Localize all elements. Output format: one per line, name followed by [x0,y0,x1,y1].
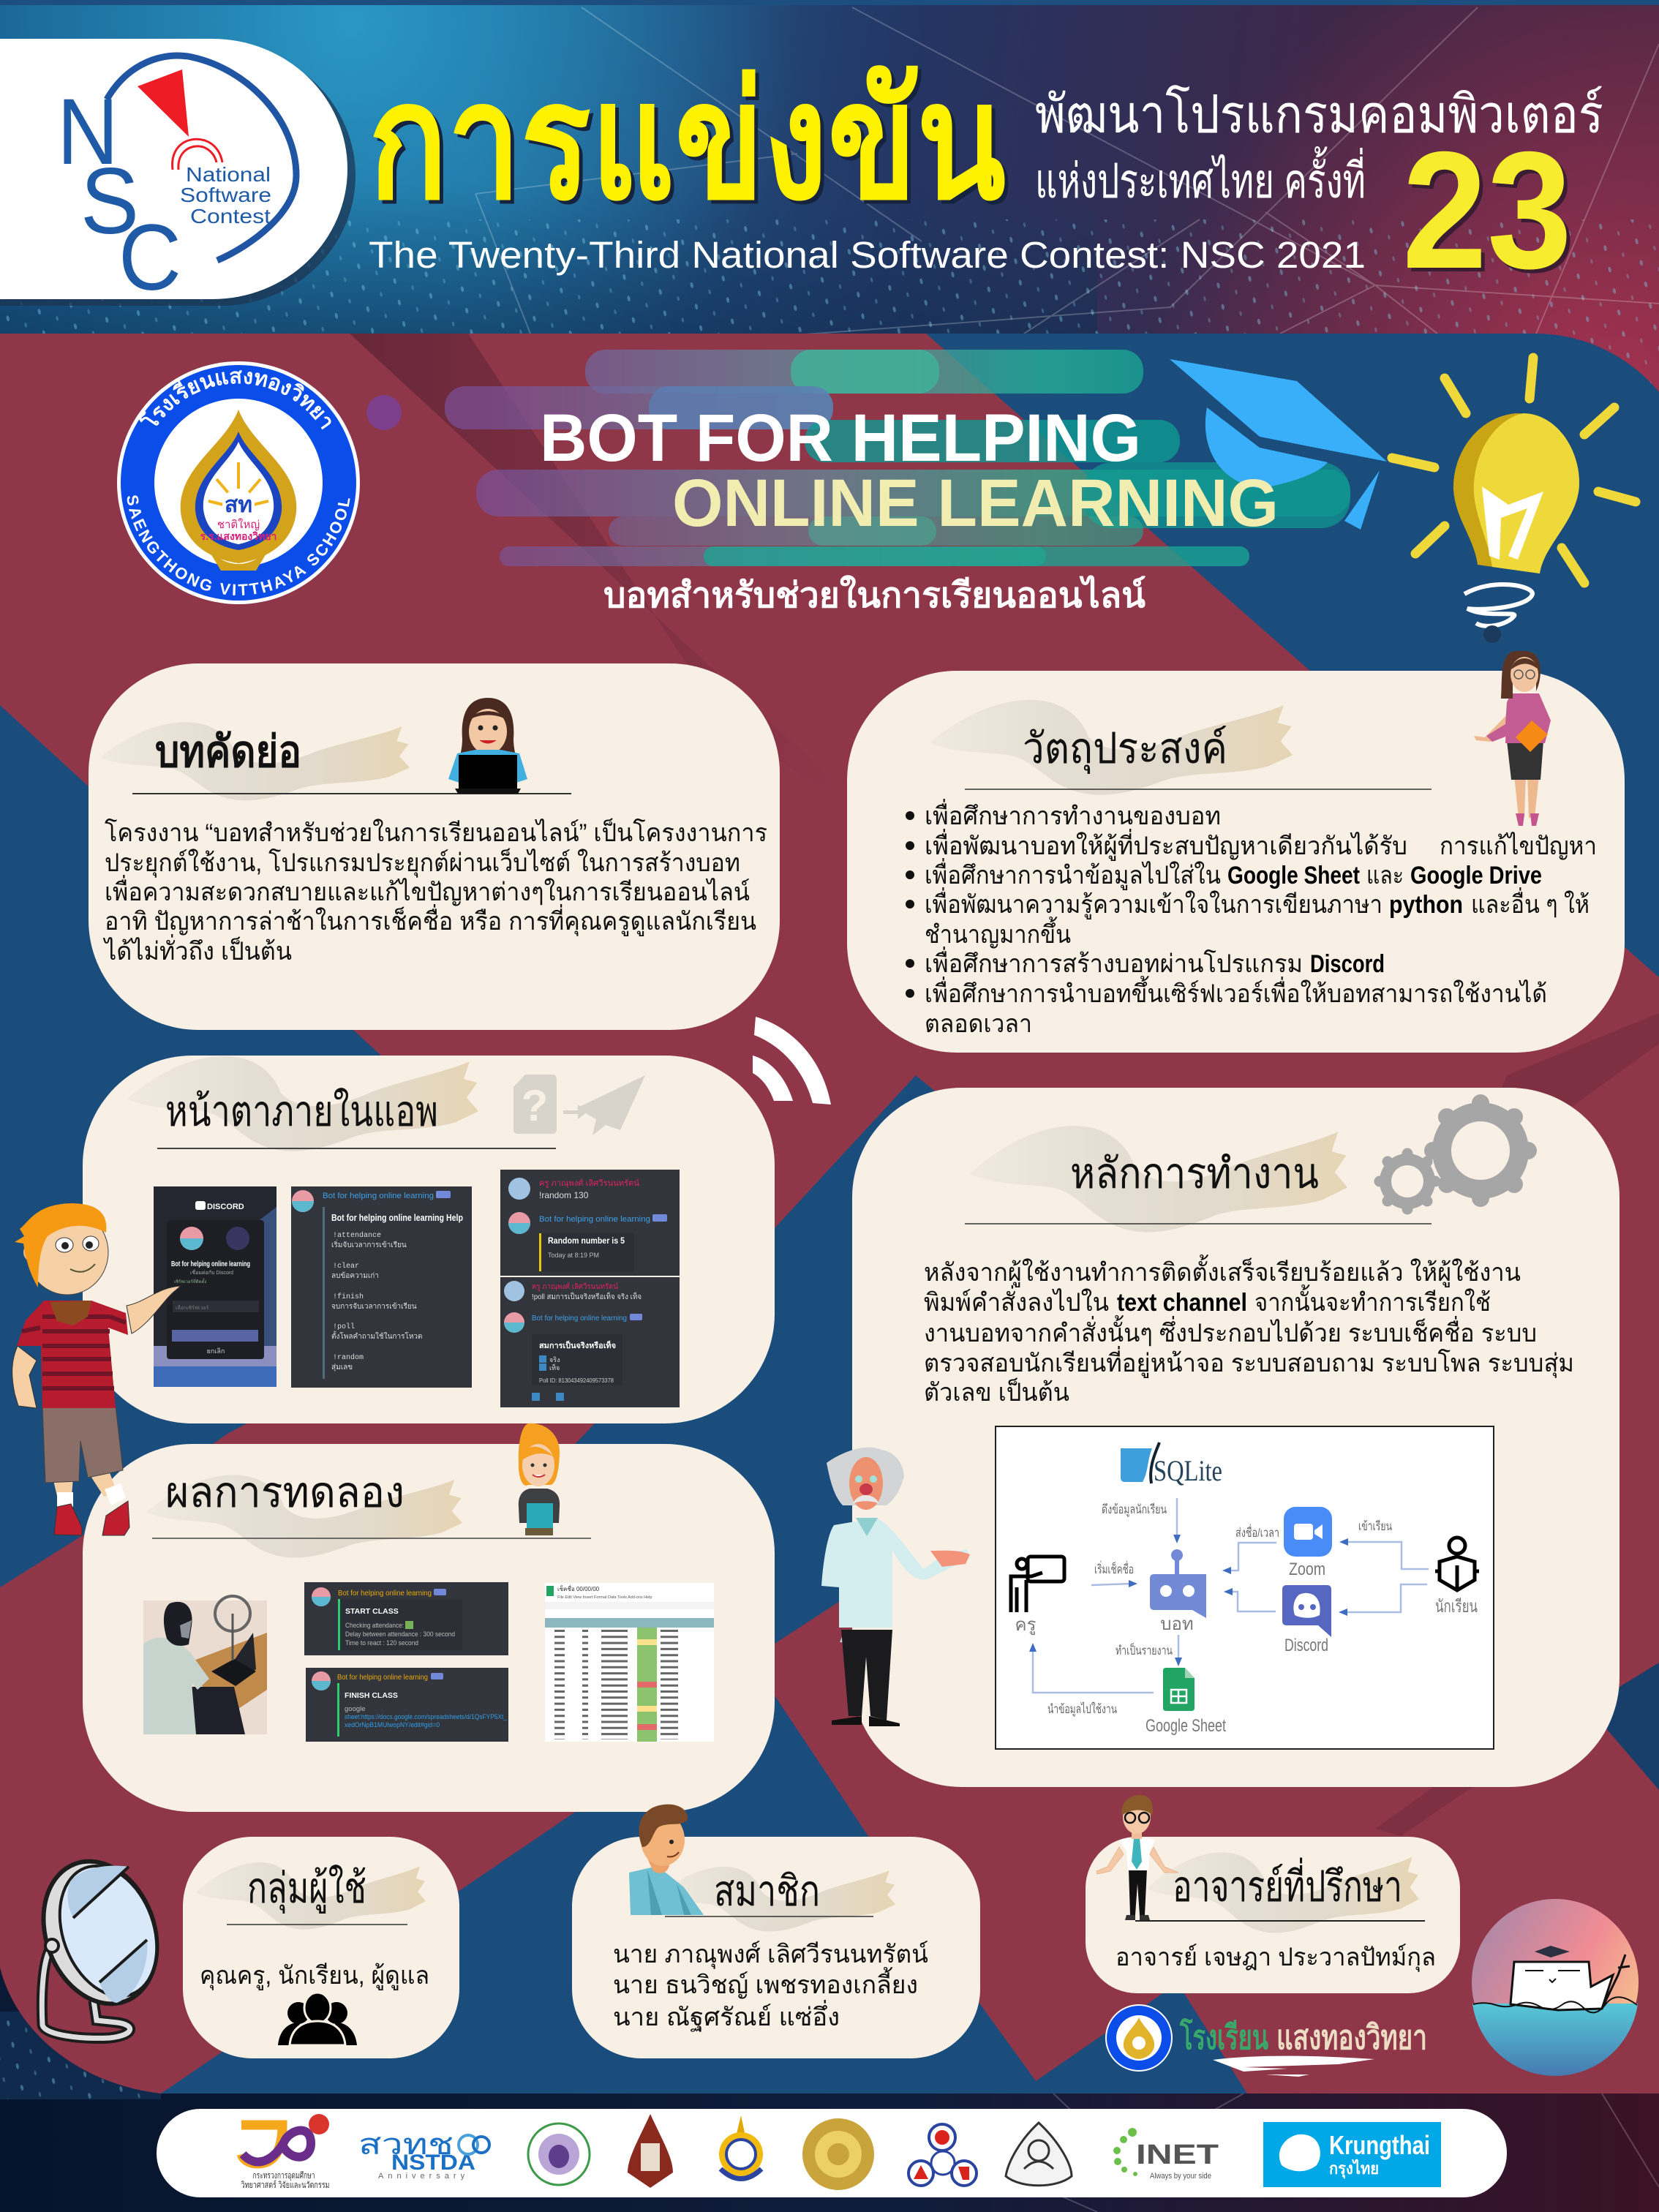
screenshot: bot help: !poll [333,1323,355,1331]
labels: diagram text [1015,1502,1478,1736]
text: school name [1179,2017,1427,2077]
screenshot: discord login [154,1186,276,1387]
labels: diagram text: ส่งชื่อ/เวลา [1235,1524,1279,1540]
labels: diagram text: บอท [1160,1614,1194,1634]
logo: NSTDA [358,2129,489,2181]
icon: discord [1282,1585,1331,1637]
list: objectives [906,799,1597,1038]
screenshot: finish class [306,1668,508,1742]
icon: school logo: ร.ร.แสงทองวิทยา [200,530,276,542]
logo: ministry of higher education [241,2114,329,2190]
screenshot: bot help: !clear [333,1262,359,1271]
screenshot: finish class: xedOrNpB1MUlwopNY/edit#gid=0 [345,1721,440,1728]
icon: google sheet [1163,1668,1195,1711]
screenshot: random command: Bot for helping online learning [539,1215,650,1224]
icon: school logo: โรงเรียนแสงทองวิทยา [139,370,331,430]
heading: working principles: หลักการทำงาน [1070,1150,1319,1197]
screenshot: bot help [291,1186,472,1388]
icon: document and paper plane: ? [522,1081,548,1130]
main background panel [0,334,1659,2094]
screenshot: poll command: ครู ภาณุพงศ์ เลิศวีรนนทรัตน์ [532,1282,618,1291]
text: working principles body: พิมพ์คำสั่งลงไปใน [924,1285,1109,1317]
logo panel: NSC: C [118,206,181,310]
icon: zoom [1284,1507,1332,1557]
subtitle: Thai contest name [1035,84,1603,208]
icon: SQLite: SQLite [1154,1454,1222,1487]
heading: objectives: วัตถุประสงค์ [1023,725,1227,775]
text: member names: นาย ภาณุพงศ์ เลิศวีรนนทรัตน์ [613,1941,928,1969]
screenshot: poll command [500,1277,680,1407]
screenshot: finish class: google [345,1705,366,1713]
screenshot: bot help: ลบข้อความเก่า [331,1271,379,1280]
heading: ONLINE LEARNING: ONLINE LEARNING [672,466,1279,541]
screenshot: finish class: FINISH CLASS [345,1691,398,1700]
logo panel: NSC: Software [180,184,271,206]
screenshot: poll command: Bot for helping online learning [532,1314,627,1323]
icon: girl holding book [519,1423,560,1535]
screenshot: random command: Random number is 5 [548,1237,625,1246]
heading: user group: กลุ่มผู้ใช้ [247,1864,366,1914]
labels: diagram text: นำข้อมูลไปใช้งาน [1047,1701,1117,1717]
list: objectives: Discord [1310,950,1385,978]
subtitle: Thai contest name: แห่งประเทศไทย ครั้งที่ [1035,146,1366,208]
panel: experiment results [83,1444,775,1812]
screenshot: bot help: สุ่มเลข [331,1363,353,1372]
icon: wifi arcs [753,1017,831,1105]
text: member names: นาย ณัฐศรัณย์ แซ่อึ่ง [613,2000,840,2032]
list: objectives: ชำนาญมากขึ้น [925,917,1071,949]
screenshot: discord login: ยกเลิก [207,1347,225,1355]
logo: NSTDA: NSTDA [391,2151,475,2175]
screenshot: start class: Time to react : 120 second [345,1639,418,1647]
logo: Silpakorn University [1006,2123,1072,2186]
screenshot: poll command: สมการเป็นจริงหรือเท็จ [539,1340,616,1350]
list: objectives: Google Sheet [1227,862,1360,889]
text: working principles body: หลังจากผู้ใช้งานทำการติดตั้งเสร็จเรียบร้อยแล้ว ให้ผู้ใช้งาน [924,1254,1521,1287]
logo: gold seal [802,2118,874,2190]
labels: diagram text: นักเรียน [1435,1597,1478,1617]
logo: Khon Kaen University [628,2114,673,2188]
panel: objectives [847,671,1625,1053]
screenshot: bot help: เริ่มจับเวลาการเข้าเรียน [331,1239,407,1249]
arrows: flow connectors [1029,1498,1429,1693]
screenshot: discord login: เลือกเซิร์ฟเวอร์ [176,1305,209,1311]
labels: diagram text: Google Sheet [1146,1716,1226,1736]
logo: Krungthai: กรุงไทย [1329,2159,1379,2179]
list: objectives: และอื่น ๆ ให้ [1471,887,1590,919]
panel: abstract [89,663,780,1030]
heading: advisor: อาจารย์ที่ปรึกษา [1173,1857,1402,1911]
heading: members: สมาชิก [714,1867,820,1915]
screenshot: bot help: Bot for helping online learning Help [331,1213,463,1223]
icon: reading student [1435,1538,1479,1590]
logo panel: NSC: N [57,80,118,184]
screenshot: bot help: !random [333,1353,364,1362]
icon: male student [629,1805,704,1915]
text: working principles body: งานบอทจากคำสั่งนั้นๆ ซึ่งประกอบไปด้วย ระบบเช็คชื่อ ระบบ [924,1315,1537,1347]
screenshot: discord login: เซิร์ฟเวอร์ที่ติดตั้ง [174,1277,206,1284]
screenshot: discord login: Bot for helping online learning [171,1260,250,1268]
text: working principles body: จากนั้นจะทำการเรียกใช้ [1254,1284,1491,1317]
banner stripes [366,350,1350,566]
icon: school logo: ชาติใหญ่ [217,518,260,531]
list: objectives: Google Drive [1410,862,1542,889]
panel: app screens [83,1056,775,1423]
screenshot: finish class: Bot for helping online learning [337,1673,428,1682]
text: abstract body: อาทิ ปัญหาการล่าช้าในการเช็คชื่อ หรือ การที่คุณครูดูแลนักเรียน [105,904,756,936]
text: working principles body: ตรวจสอบนักเรียนที่อยู่หน้าจอ ระบบสอบถาม ระบบโพล ระบบสุ่ม [924,1346,1574,1378]
text: school name: แสงทองวิทยา [1276,2018,1427,2056]
heading: Thai project title: บอทสำหรับช่วยในการเรียนออนไลน์ [603,574,1146,615]
labels: diagram text: ทำเป็นรายงาน [1116,1642,1173,1658]
screenshot: finish class: sheet:https://docs.google.com/spreadsheets/d/1QsFYP5Xt_ [345,1713,508,1720]
icon: old scientist [821,1447,970,1726]
text: abstract body: โครงงาน “บอทสำหรับช่วยในการเรียนออนไลน์” เป็นโครงงานการ [105,818,767,847]
icon: woman with laptop [448,698,527,794]
logo: technology institute gears [908,2124,977,2186]
header background [0,0,1659,454]
screenshot: attendance spreadsheet [545,1583,714,1742]
text: advisor name: อาจารย์ เจษฎา ประวาลปัทม์กุล [1116,1944,1436,1972]
icon: mascot circle [1472,1899,1639,2076]
text: user group list: คุณครู, นักเรียน, ผู้ดูแล [200,1962,429,1990]
icon: teacher at board [1011,1557,1064,1612]
logo: INET: INET [1136,2140,1219,2170]
logo: Krungthai [1263,2122,1441,2187]
screenshot: bot help: !attendance [333,1231,381,1240]
icon: document and paper plane [514,1075,645,1135]
list: objectives: เพื่อพัฒนาบอทให้ผู้ที่ประสบปัญหาเดียวกันได้รับ [925,829,1407,861]
screenshot: poll command: Poll ID: 813043492409573378 [539,1377,614,1384]
labels: diagram text: Zoom [1289,1560,1325,1579]
icon: standing teacher [1474,651,1551,826]
text: member names [613,1941,928,2032]
panel: user group [183,1837,459,2058]
icon: gears [1380,1102,1529,1209]
list: objectives: เพื่อศึกษาการนำบอทขึ้นเซิร์ฟเวอร์เพื่อให้บอทสามารถใช้งานได้ [925,976,1547,1008]
list: objectives: และ [1366,862,1404,889]
screenshot: discord login: DISCORD [207,1203,244,1211]
chart: system flow diagram [996,1426,1494,1749]
screenshot: poll command: !poll สมการเป็นจริงหรือเท็จ จริง เท็จ [532,1291,642,1301]
screenshot: random command: Today at 8:19 PM [548,1252,599,1259]
panel: sponsor logos [157,2109,1507,2197]
screenshot: poll command: จริง [549,1356,560,1363]
logo: ministry of higher education: กระทรวงการอุดมศึกษา [253,2170,315,2181]
heading: app screens: หน้าตาภายในแอพ [165,1087,438,1135]
screenshot: start class: START CLASS [345,1607,399,1616]
logo panel: NSC: S [80,149,139,254]
labels: diagram text: ดึงข้อมูลนักเรียน [1102,1502,1167,1517]
logo panel: NSC: Contest [190,205,271,227]
icon: school logo [117,361,360,604]
screenshot: poll command: เท็จ [549,1363,560,1372]
labels: diagram text: ครู [1015,1615,1037,1636]
heading: BOT FOR HELPING: BOT FOR HELPING [540,401,1141,475]
icon: school logo: สท [225,493,252,517]
list: objectives: เพื่อศึกษาการทำงานของบอท [925,799,1221,830]
list: objectives: เพื่อพัฒนาความรู้ความเข้าใจในการเขียนภาษา [925,887,1382,919]
screenshot: random command: !random 130 [539,1190,589,1200]
screenshot: start class: Checking attendance: [345,1622,404,1630]
screenshot: random command: ครู ภาณุพงศ์ เลิศวีรนนทรัตน์ [539,1178,639,1188]
screenshot: bot help: ตั้งโพลคำถามใช้ในการโหวต [331,1331,423,1341]
labels: diagram text: เริ่มเช็คชื่อ [1094,1560,1134,1576]
logo: NSTDA: สวทช [358,2129,454,2161]
icon: small school logo [1105,2004,1173,2072]
text: abstract body [102,818,767,966]
text: school name: โรงเรียน [1179,2017,1268,2056]
screenshot: start class [304,1582,508,1655]
screenshot: random command [500,1170,680,1276]
text: abstract body: ได้ไม่ทั่วถึง เป็นต้น [102,934,292,966]
heading: abstract: บทคัดย่อ [155,727,301,776]
text: abstract body: เพื่อความสะดวกสบายและแก้ไขปัญหาต่างๆในการเรียนออนไลน์ [105,875,750,906]
subtitle: English contest name: The Twenty-Third National Software Contest: NSC 2021 [369,234,1366,276]
screenshot: attendance spreadsheet: เช็คชื่อ 00/00/00 [557,1584,600,1592]
icon: boy pointing [12,1203,181,1535]
list: objectives: python [1389,891,1463,919]
logo: INET [1113,2128,1219,2181]
text: working principles body: ตัวเลข เป็นต้น [924,1377,1069,1407]
list: objectives: เพื่อศึกษาการสร้างบอทผ่านโปรแกรม [925,947,1303,978]
logo panel: NSC [0,39,356,310]
icon: SQLite [1121,1442,1222,1487]
logo: NSTDA: Anniversary [378,2172,469,2181]
logo panel: NSC: National [186,163,271,186]
labels: diagram text: เข้าเรียน [1358,1519,1392,1533]
heading: results: ผลการทดลอง [165,1469,405,1516]
number 23: 23 [1402,118,1572,304]
panel: advisor [1086,1837,1460,1993]
list: objectives: การแก้ไขปัญหา [1440,832,1597,860]
text: member names: นาย ธนวิชญ์ เพชรทองเกลี้ยง [613,1967,918,1999]
icon: graduation cap [1170,359,1387,530]
panel: working principles [852,1088,1620,1787]
title: การแข่งขัน: การแข่งขัน [369,51,1006,233]
photo: student at laptop [143,1596,267,1734]
text: working principles body: text channel [1117,1289,1247,1317]
text: working principles body [924,1254,1574,1407]
list: objectives: เพื่อศึกษาการนำข้อมูลไปใส่ใน [925,858,1221,890]
icon: people [278,1993,357,2045]
icon: school logo: SAENGTHONG VITTHAYA SCHOOL [127,495,350,595]
icon: light bulb [1392,358,1636,643]
text: abstract body: ประยุกต์ใช้งาน, โปรแกรมประยุกต์ผ่านเว็บไซต์ ในการสร้างบอท [105,848,740,878]
icon: mirror [24,1846,176,2038]
screenshot: discord login: เชื่อมต่อกับ Discord [190,1269,233,1276]
labels: diagram text: Discord [1284,1636,1328,1655]
logo: INET: Always by your side [1150,2172,1211,2181]
icon: male teacher with glasses [1096,1795,1178,1920]
logo: Krungthai: Krungthai [1329,2130,1430,2160]
screenshot: start class: Bot for helping online learning [338,1589,432,1598]
list: objectives: ตลอดเวลา [925,1010,1032,1038]
screenshot: start class: Delay between attendance : 300 second [345,1630,455,1639]
icon: bot [1150,1549,1206,1618]
screenshot: bot help: Bot for helping online learning [323,1192,434,1200]
screenshot: attendance spreadsheet: File Edit View Insert Format Data Tools Add-ons Help [557,1595,652,1600]
logo: ministry of higher education: วิทยาศาสตร์ วิจัยและนวัตกรรม [241,2180,329,2190]
panel: members [572,1837,980,2058]
screenshot: bot help: จบการจับเวลาการเข้าเรียน [331,1302,417,1311]
logo: Chiang Mai University [528,2123,590,2185]
screenshot: bot help: !finish [333,1293,364,1301]
footer background [0,2012,1659,2212]
logo: Prince of Songkla University [719,2115,763,2178]
